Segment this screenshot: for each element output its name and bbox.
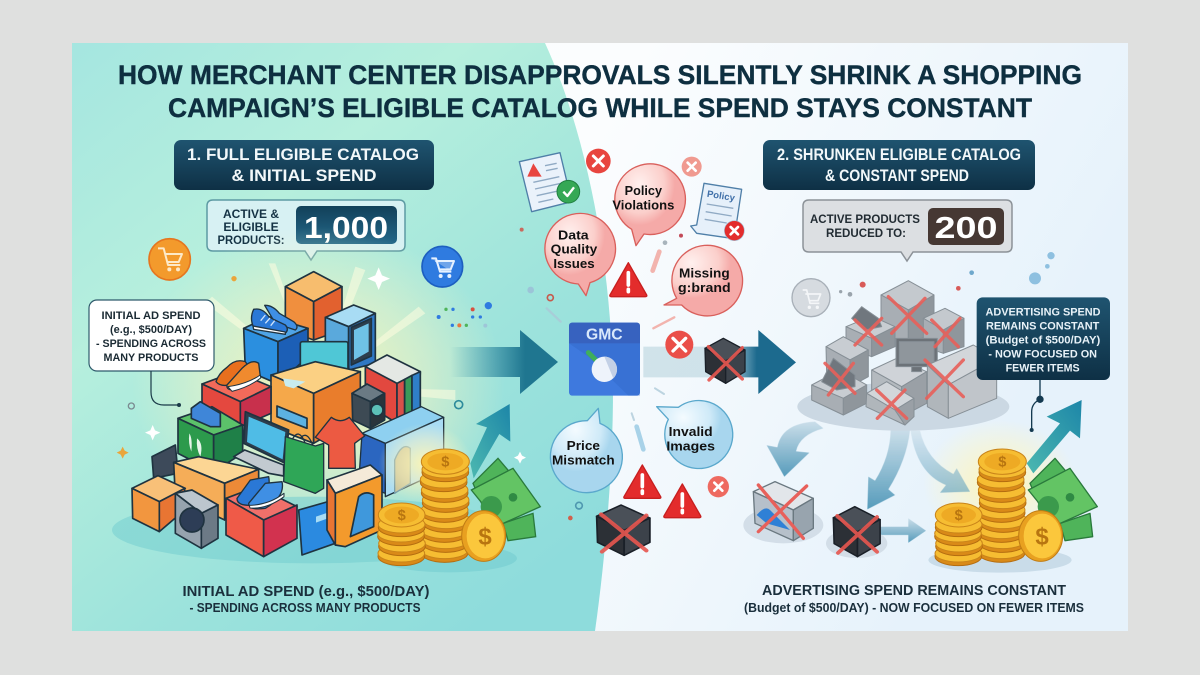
icon: policy document: Policy (706, 189, 736, 203)
heading: section 2 (763, 140, 1035, 190)
callout: active and eligible products 1,000: ELIGIBLE (223, 220, 279, 234)
GMC tile: GMC (586, 326, 623, 343)
caption: advertising spend remains constant: ADVERTISING SPEND REMAINS CONSTANT (762, 583, 1066, 599)
title: HOW MERCHANT CENTER DISAPPROVALS SILENTLY SHRINK A SHOPPING (118, 60, 1082, 90)
coin dollar signs (398, 455, 492, 551)
glow behind pile (132, 227, 505, 547)
rejected dark box (826, 507, 887, 558)
box: blue with tablet (325, 305, 375, 370)
icon: blue sneakers top (251, 305, 297, 334)
monitor (300, 342, 348, 379)
note: initial ad spend (89, 300, 214, 407)
note: initial ad spend: - SPENDING ACROSS (96, 338, 206, 350)
box: blue shoebox (244, 317, 308, 384)
box: red with blue shoes (226, 477, 297, 557)
callout: active products reduced to 200: REDUCED TO: (826, 226, 906, 240)
callout: advertising spend constant: FEWER ITEMS (1006, 363, 1080, 375)
coin dollar signs: $ (998, 455, 1006, 471)
coins and cash: constant spend (928, 449, 1097, 573)
callout: advertising spend constant: REMAINS CONSTANT (986, 321, 1100, 333)
panel: left product pile (112, 227, 517, 572)
bubble: Policy Violations: Policy (625, 183, 663, 198)
book blue (299, 500, 335, 555)
coin dollar signs: $ (441, 455, 449, 471)
icon: red x over arrow (665, 331, 693, 359)
glow behind coins (923, 420, 1077, 547)
callout: active products reduced to 200: 200 (934, 210, 998, 245)
icon: policy document (691, 183, 744, 241)
coin glow (379, 423, 472, 503)
coin dollar signs (955, 455, 1049, 551)
box: long orange (174, 457, 259, 520)
speaker dark (352, 384, 385, 428)
laptop (234, 412, 289, 476)
book orange (327, 465, 382, 547)
bubble: Policy Violations (612, 164, 685, 246)
note: initial ad spend: (e.g., $500/DAY) (110, 324, 192, 336)
coin dollar signs: $ (1035, 524, 1049, 551)
rising arrow (1027, 400, 1082, 473)
coin dollar signs: $ (955, 508, 963, 524)
caption: initial ad spend (182, 584, 430, 615)
callout: advertising spend constant: - NOW FOCUSED ON (988, 349, 1097, 361)
shopping bag (284, 434, 324, 493)
caption: initial ad spend: INITIAL AD SPEND (e.g., $500/DAY) (182, 584, 430, 600)
note: initial ad spend: INITIAL AD SPEND (102, 310, 201, 322)
bubble: Missing g:brand: g:brand (678, 280, 731, 295)
heading: section 2: 2. SHRUNKEN ELIGIBLE CATALOG (777, 145, 1021, 164)
icon: grey cart (792, 279, 830, 317)
caption: advertising spend remains constant (744, 583, 1084, 615)
title (118, 60, 1082, 123)
coin shadow (380, 544, 517, 572)
panel: background right (72, 43, 1128, 631)
caption: initial ad spend: - SPENDING ACROSS MANY PRODUCTS (190, 600, 421, 615)
bubble: Price Mismatch: Mismatch (552, 452, 615, 467)
panel: background left curved (72, 43, 613, 631)
bubble: Data Quality Issues: Data (558, 227, 589, 242)
arrow: GMC output (643, 330, 796, 394)
decorative dots (514, 228, 683, 520)
bubble: Data Quality Issues: Quality (551, 242, 598, 257)
arrow: catalog into GMC (450, 330, 558, 394)
bubble: Data Quality Issues: Issues (553, 256, 595, 271)
bubble: Missing g:brand (664, 245, 743, 316)
pile shadow (112, 497, 512, 563)
bubble: Price Mismatch: Price (567, 438, 600, 453)
icon: blue cart (422, 246, 463, 287)
box: top orange (285, 272, 342, 340)
bubble: Policy Violations: Violations (612, 197, 674, 212)
heading: section 1 (174, 140, 434, 190)
rejected box on arrow (705, 338, 745, 383)
icon: x badges (586, 149, 729, 497)
callout: advertising spend constant: (Budget of $500/DAY) (986, 335, 1101, 347)
icon: orange cart (149, 239, 190, 280)
icon: document with warning (519, 153, 580, 212)
grey boxes (812, 281, 997, 425)
callout: active and eligible products 1,000: PRODUCTS: (218, 233, 284, 247)
books (365, 355, 420, 423)
light rays (205, 263, 455, 400)
note: initial ad spend: MANY PRODUCTS (104, 352, 198, 364)
red crosses (825, 297, 963, 418)
bubble: Missing g:brand: Missing (679, 266, 730, 281)
heading: section 1: & INITIAL SPEND (232, 166, 376, 185)
GMC tile (569, 323, 640, 396)
decorative dots (839, 252, 1055, 297)
callout: advertising spend constant (977, 297, 1110, 432)
coin dollar signs: $ (398, 508, 406, 524)
callout: active products reduced to 200 (803, 200, 1012, 261)
caption: advertising spend remains constant: (Budget of $500/DAY) - NOW FOCUSED ON FEWER ITEMS (744, 601, 1084, 615)
device grey (175, 490, 218, 548)
box: red shoebox with orange shoes (202, 361, 271, 427)
bubble: Invalid Images: Images (666, 438, 715, 453)
callout: advertising spend constant: ADVERTISING SPEND (985, 307, 1101, 319)
heading: section 2: & CONSTANT SPEND (825, 166, 969, 185)
coin dollar signs: $ (478, 524, 492, 551)
bubble: Price Mismatch (550, 408, 622, 493)
bubble: Invalid Images (657, 401, 733, 469)
pile shadow (797, 383, 1009, 431)
panel: right grey pile (743, 252, 1110, 573)
t-shirt (315, 417, 365, 468)
callout: active products reduced to 200: ACTIVE PRODUCTS (810, 212, 920, 226)
title: CAMPAIGN’S ELIGIBLE CATALOG WHILE SPEND STAYS CONSTANT (168, 93, 1032, 123)
bubble: Invalid Images: Invalid (669, 424, 713, 439)
box: large pale blue (359, 407, 444, 497)
box: big orange (271, 362, 360, 443)
callout: active and eligible products 1,000: 1,000 (304, 210, 388, 245)
flow arrows from pile (767, 422, 970, 543)
coins and cash: initial spend (378, 449, 540, 566)
bubble: Data Quality Issues (545, 213, 616, 296)
box: dark back (152, 445, 178, 478)
rejected shoebox (743, 482, 823, 543)
box: small orange (132, 476, 185, 532)
callout: active and eligible products 1,000 (207, 200, 405, 260)
decorative dots (117, 267, 492, 459)
rising arrow (470, 404, 510, 478)
callout: active and eligible products 1,000: ACTIVE & (223, 207, 279, 221)
rejected box bottom (597, 505, 650, 555)
heading: section 1: 1. FULL ELIGIBLE CATALOG (187, 145, 419, 164)
icon: warning triangles (610, 263, 701, 518)
box: green (178, 402, 243, 472)
panel: center disapprovals (514, 149, 796, 555)
